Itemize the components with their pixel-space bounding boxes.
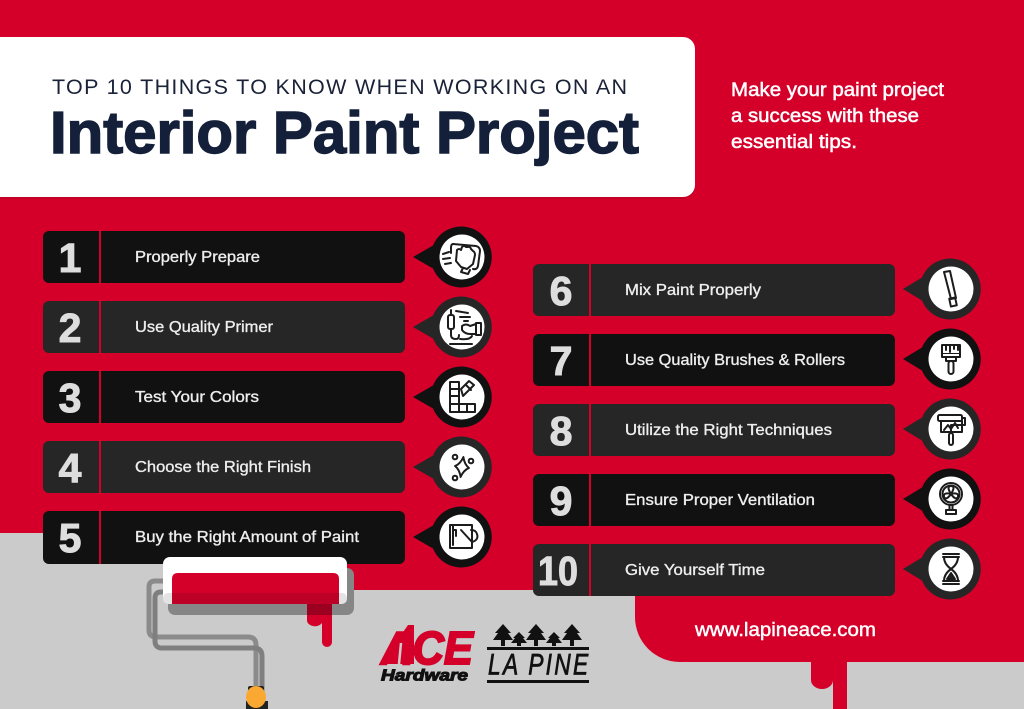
tip 4: Choose the Right Finish: [135, 459, 311, 476]
tip 5: Buy the Right Amount of Paint: [135, 529, 360, 546]
tip 10: [533, 538, 981, 600]
tip 7: 7: [550, 338, 572, 384]
tip 4: [43, 436, 492, 497]
tip 2: [43, 297, 492, 358]
tip 9: [533, 468, 981, 530]
logo: Ace Hardware: Hardware: [381, 668, 468, 684]
tip 3: 3: [59, 375, 81, 421]
tip 2: 2: [59, 305, 81, 351]
tip 1: 1: [59, 235, 81, 281]
icon: fan: [940, 483, 962, 514]
tip 7: Use Quality Brushes & Rollers: [625, 352, 845, 369]
title kicker: TOP 10 THINGS TO KNOW WHEN WORKING ON AN: [52, 75, 627, 99]
background: grey lower area: [0, 533, 1024, 709]
icon: stir stick: [944, 271, 957, 307]
icon: sparkle finish: [453, 455, 473, 480]
intro text: Make your paint project: [731, 80, 945, 101]
tip 8: [533, 398, 981, 459]
icon: roller technique: [938, 415, 965, 445]
roller handle: [149, 581, 262, 692]
title card: [0, 37, 695, 199]
tip 10: 10: [538, 548, 578, 594]
intro text: a success with these: [731, 106, 919, 127]
tip 9: Ensure Proper Ventilation: [625, 492, 815, 509]
main title: Interior Paint Project: [50, 100, 639, 166]
tip 7: [533, 328, 981, 389]
tip 8: 8: [550, 408, 572, 454]
tip 8: Utilize the Right Techniques: [625, 422, 832, 439]
logo: La Pine: [487, 624, 590, 683]
tip 1: [43, 226, 492, 288]
tip 2: Use Quality Primer: [135, 319, 274, 336]
icon: primer tube and hand: [448, 310, 481, 344]
intro text: [731, 80, 945, 153]
tip 9: 9: [550, 478, 572, 524]
paint drips from red corner panel: [811, 660, 847, 709]
paint drip on roller: [307, 604, 332, 647]
roller cover: [163, 557, 347, 604]
icon: hourglass: [943, 554, 959, 584]
roller grip: [248, 686, 264, 691]
website url: www.lapineace.com: [694, 620, 876, 641]
intro text: essential tips.: [731, 132, 857, 153]
icon: paint can: [450, 525, 477, 548]
icon: hand wiping: [443, 244, 480, 274]
logo: Ace Hardware: ACE: [380, 622, 474, 674]
tip 10: Give Yourself Time: [625, 562, 765, 579]
tip 6: Mix Paint Properly: [625, 282, 761, 299]
tip 3: Test Your Colors: [135, 389, 259, 406]
tip 6: 6: [550, 268, 572, 314]
tip 4: 4: [59, 445, 82, 491]
roller shadow: [168, 568, 354, 615]
roller paint: [172, 573, 339, 604]
tip 5: 5: [59, 515, 81, 561]
tip 1: Properly Prepare: [135, 249, 260, 266]
tip 6: [533, 258, 981, 319]
pine trees: [493, 624, 582, 646]
tip 5: [43, 506, 492, 567]
icon: paint brush: [942, 345, 960, 374]
tip 3: [43, 366, 492, 427]
icon: colour swatches: [450, 381, 475, 412]
logo: La Pine: LA PINE: [488, 647, 590, 681]
paint roller illustration: [149, 557, 354, 709]
